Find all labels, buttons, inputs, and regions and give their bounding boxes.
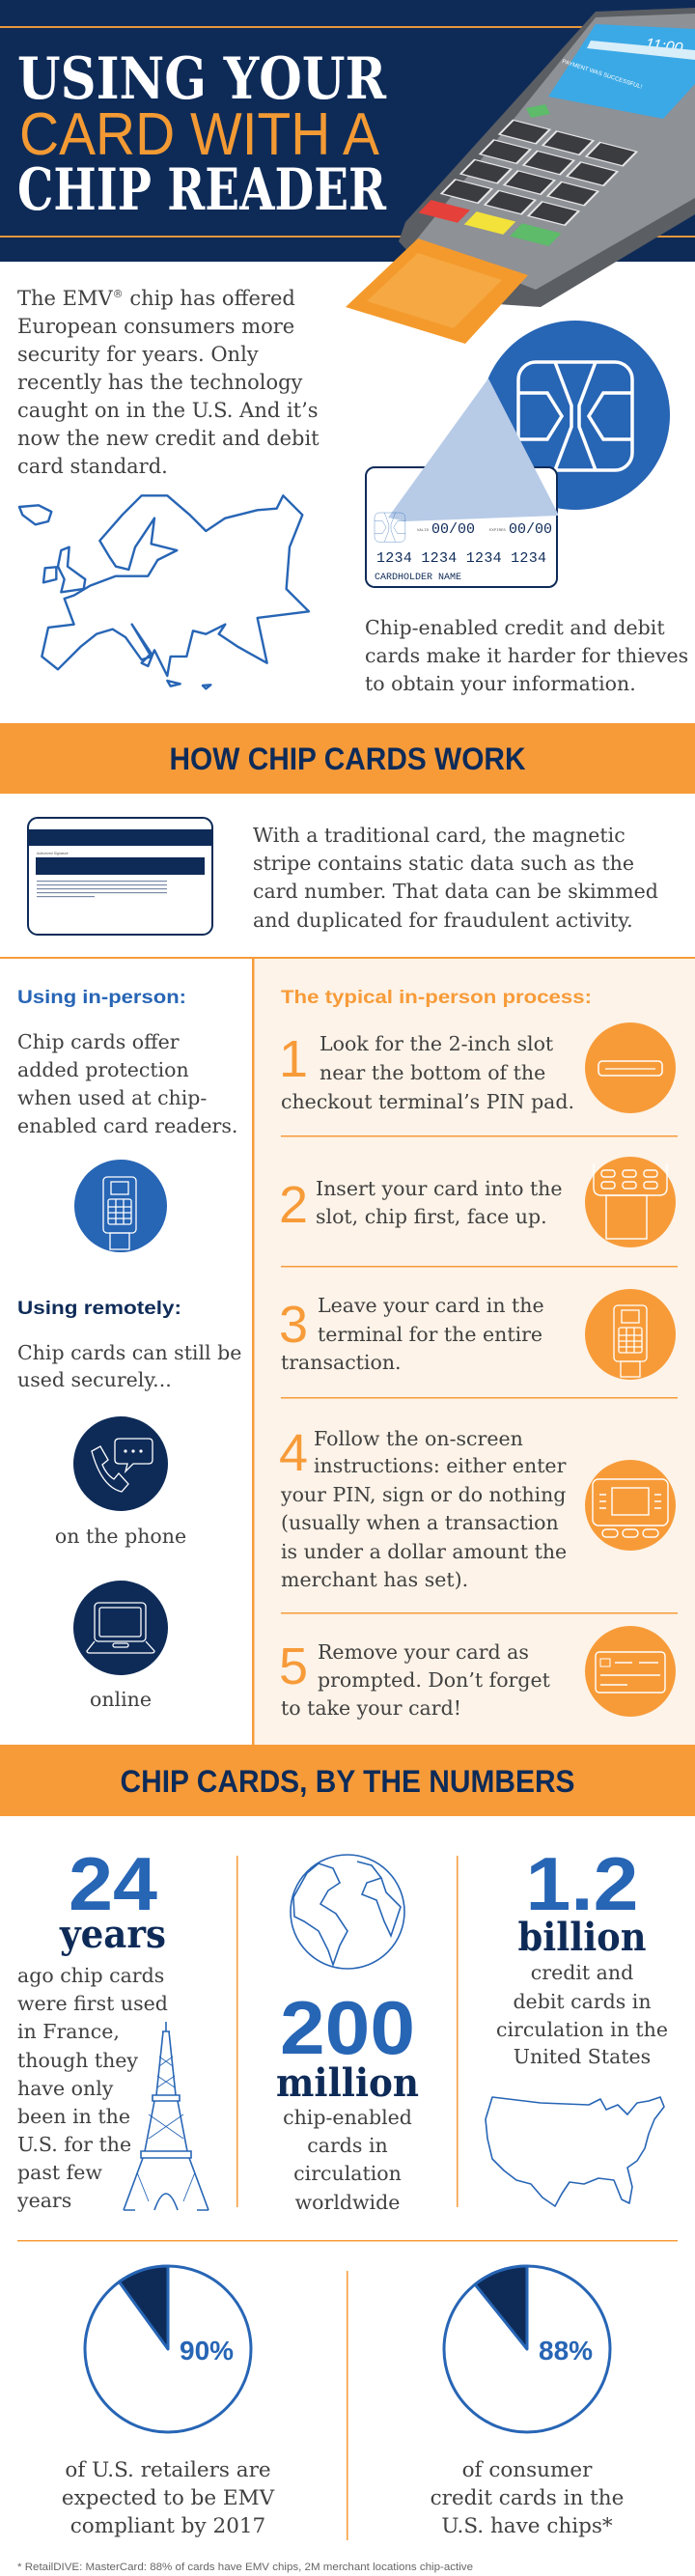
caption: consumer cards xyxy=(431,2458,624,2538)
stat: 200 million: worldwide xyxy=(295,2191,400,2214)
icon: magnetic stripe card back xyxy=(28,818,212,935)
heading: how chip cards work xyxy=(0,723,695,794)
text: in-person: enabled card readers. xyxy=(17,1114,237,1137)
caption: chip-enabled cards xyxy=(365,616,688,695)
intro text: ® xyxy=(113,288,124,300)
step 5: Remove your card as xyxy=(318,1640,529,1664)
title: CHIP READER xyxy=(17,156,387,224)
footnote: * RetailDIVE: MasterCard: 88% of cards have EMV chips, 2M merchant locations chip-active xyxy=(17,2562,473,2573)
stat: 1.2 billion: debit cards in xyxy=(513,1990,652,2013)
text: remotely: Chip cards can still be xyxy=(17,1341,241,1364)
stat: 24 years: years xyxy=(16,2189,71,2212)
text: remotely xyxy=(17,1341,241,1391)
text: in-person xyxy=(17,1030,237,1137)
pie chart: 88% xyxy=(444,2266,610,2432)
step 5 xyxy=(279,1626,676,1720)
caption: retailers: expected to be EMV xyxy=(62,2486,275,2510)
illustration: magnified chip on card: 00/00 xyxy=(509,521,552,538)
text: remotely: used securely... xyxy=(17,1368,172,1391)
step 4: merchant has set). xyxy=(281,1568,468,1591)
text: traditional card xyxy=(253,824,658,932)
stat: 24 years: though they xyxy=(17,2049,138,2072)
illustration: magnified chip on card xyxy=(366,321,670,587)
caption: consumer cards: U.S. have chips* xyxy=(441,2514,613,2538)
step 5: prompted. Don’t forget xyxy=(318,1668,551,1692)
intro text: recently has the technology xyxy=(17,371,303,394)
heading: chip cards by the numbers xyxy=(0,1746,695,1816)
heading: typical process: The typical in-person process: xyxy=(281,988,592,1008)
text: traditional card: stripe contains static data such as the xyxy=(253,852,634,875)
panel: process section background xyxy=(0,957,695,1747)
icon: laptop xyxy=(73,1581,168,1675)
pie chart: 90% xyxy=(85,2266,251,2432)
step 3: terminal for the entire xyxy=(318,1323,542,1346)
icon: card terminal (blue) xyxy=(74,1160,167,1252)
illustration: magnified chip on card: EXPIRES xyxy=(489,529,506,533)
icon: phone xyxy=(73,1416,168,1511)
stat: 24 years: 24 xyxy=(69,1841,157,1926)
illustration: magnified chip on card: VALID xyxy=(417,529,430,533)
intro text: caught on in the U.S. And it’s xyxy=(17,399,319,422)
divider lines xyxy=(236,1856,458,2207)
caption: chip-enabled cards: cards make it harder for thieves xyxy=(365,644,688,667)
step 1: near the bottom of the xyxy=(320,1061,545,1084)
stat: 1.2 billion: credit and xyxy=(531,1961,633,1984)
step 2: 2 xyxy=(279,1176,308,1234)
caption: retailers: compliant by 2017 xyxy=(70,2514,265,2538)
step 2: slot, chip first, face up. xyxy=(316,1205,547,1228)
text: in-person: Chip cards offer xyxy=(17,1030,180,1053)
pie chart: 90%: 90% xyxy=(180,2336,234,2366)
icon: magnetic stripe card back: Authorized Signature xyxy=(37,852,69,855)
stat: 1.2 billion xyxy=(496,1841,668,2068)
heading: using remotely: Using remotely: xyxy=(17,1299,181,1319)
step 3: 3 xyxy=(279,1296,308,1354)
caption: chip-enabled cards: Chip-enabled credit and debit xyxy=(365,616,665,639)
text: in-person: when used at chip- xyxy=(17,1086,207,1109)
step 1: Look for the 2-inch slot xyxy=(320,1032,554,1055)
heading: how chip cards work: HOW CHIP CARDS WORK xyxy=(170,742,525,776)
intro text: The EMV xyxy=(17,287,113,310)
stat: 24 years: in France, xyxy=(17,2020,120,2043)
intro text: security for years. Only xyxy=(17,343,259,366)
illustration: magnified chip on card: 00/00 xyxy=(431,521,475,538)
stat: 200 million: circulation xyxy=(293,2162,402,2185)
intro text xyxy=(17,287,320,478)
intro text: chip has offered xyxy=(124,287,295,310)
step 4: your PIN, sign or do nothing xyxy=(280,1483,566,1506)
stat: 24 years: were first used xyxy=(17,1992,168,2015)
heading: chip cards by the numbers: CHIP CARDS, BY THE NUMBERS xyxy=(120,1764,575,1799)
step 3: transaction. xyxy=(281,1351,402,1374)
step 4 xyxy=(279,1424,676,1591)
text: in-person: added protection xyxy=(17,1058,189,1081)
step 4: is under a dollar amount the xyxy=(281,1540,567,1563)
stat: 24 years: ago chip cards xyxy=(17,1964,164,1987)
text: traditional card: and duplicated for fraudulent activity. xyxy=(253,909,633,932)
stat: 24 years: U.S. for the xyxy=(17,2133,131,2156)
step 3 xyxy=(279,1289,676,1380)
stat: 200 million: 200 xyxy=(280,1985,415,2070)
illustration: card terminal with card: 11:00 xyxy=(644,36,683,57)
step 5: 5 xyxy=(279,1638,308,1695)
title: USING YOUR xyxy=(17,45,387,113)
stat: 200 million: million xyxy=(276,2060,419,2106)
illustration: magnified chip on card: CARDHOLDER NAME xyxy=(375,573,461,583)
intro text: European consumers more xyxy=(17,315,294,338)
caption: retailers: of U.S. retailers are xyxy=(65,2458,271,2482)
illustration: magnified chip on card: 1234 1234 1234 1234 xyxy=(376,550,546,567)
stat: 200 million: cards in xyxy=(307,2134,388,2157)
stat: 1.2 billion: 1.2 xyxy=(525,1841,639,1926)
label: online: online xyxy=(90,1688,152,1711)
step 1: 1 xyxy=(279,1030,308,1088)
step 4: 4 xyxy=(279,1424,308,1482)
step 4: Follow the on-screen xyxy=(314,1427,523,1450)
stat: 24 years: past few xyxy=(17,2161,102,2184)
caption: consumer cards: credit cards in the xyxy=(431,2486,624,2510)
heading: using in-person: Using in-person: xyxy=(17,988,186,1008)
stat: 24 years: been in the xyxy=(17,2105,130,2128)
caption: consumer cards: of consumer xyxy=(462,2458,593,2482)
step 1: checkout terminal’s PIN pad. xyxy=(281,1090,574,1113)
step 2 xyxy=(279,1157,676,1247)
pie chart: 88%: 88% xyxy=(539,2336,593,2366)
stat: 24 years xyxy=(16,1841,168,2212)
step 5: to take your card! xyxy=(281,1696,461,1720)
stat: 200 million xyxy=(276,1985,419,2214)
intro text: now the new credit and debit xyxy=(17,427,320,450)
text: traditional card: With a traditional card, the magnetic xyxy=(253,824,626,847)
illustration: card terminal with card: PAYMENT WAS SUCCESSFUL! xyxy=(561,59,643,91)
icon: US map xyxy=(486,2097,664,2206)
step 4: (usually when a transaction xyxy=(281,1511,559,1534)
header banner xyxy=(0,0,695,262)
icon: europe map xyxy=(19,495,309,688)
stat: 200 million: chip-enabled xyxy=(283,2106,412,2129)
stat: 1.2 billion: United States xyxy=(514,2045,651,2068)
stat: 1.2 billion: billion xyxy=(517,1915,647,1960)
step 1 xyxy=(279,1022,676,1113)
stat: 24 years: have only xyxy=(17,2077,114,2100)
caption: chip-enabled cards: to obtain your information. xyxy=(365,672,636,695)
step 4: instructions: either enter xyxy=(314,1454,567,1477)
label: on the phone: on the phone xyxy=(55,1525,186,1548)
caption: retailers xyxy=(62,2458,275,2538)
stat: 24 years: years xyxy=(59,1912,166,1957)
text: traditional card: card number. That data can be skimmed xyxy=(253,880,658,903)
stat: 1.2 billion: circulation in the xyxy=(496,2018,668,2041)
title: CARD WITH A xyxy=(19,101,380,168)
title xyxy=(17,45,387,224)
step 2: Insert your card into the xyxy=(316,1177,563,1200)
icon: globe xyxy=(291,1855,404,1969)
step 3: Leave your card in the xyxy=(318,1294,544,1317)
illustration: card terminal with card xyxy=(346,8,695,344)
icon: eiffel tower xyxy=(124,2022,208,2210)
intro text: card standard. xyxy=(17,455,168,478)
